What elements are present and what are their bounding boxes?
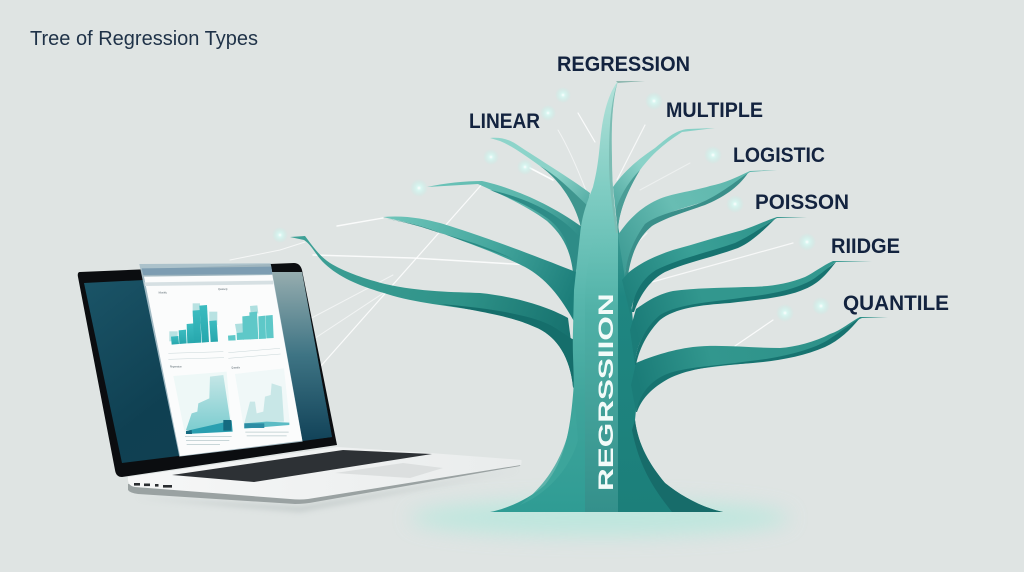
branch: second left (427, 181, 582, 282)
branch: poisson (622, 217, 807, 318)
label: ridge: RIIDGE (831, 235, 900, 258)
laptop screen (84, 272, 332, 463)
branch: linear (490, 138, 590, 232)
dashboard window (139, 263, 303, 457)
strip text: REGRSSIION (594, 293, 618, 491)
window frame (139, 263, 303, 457)
laptop (78, 263, 522, 512)
base deck (128, 447, 522, 500)
window title bar (142, 267, 272, 275)
branch: quantile (631, 317, 888, 412)
laptop base (128, 447, 522, 504)
label: multiple: MULTIPLE (666, 99, 763, 122)
chart 2: Quarterly (218, 288, 228, 291)
branch: third left (383, 216, 576, 325)
base underside (128, 460, 522, 504)
label: logistic: LOGISTIC (733, 144, 825, 167)
window page (144, 275, 302, 456)
labels (469, 53, 949, 315)
laptop shadow (135, 470, 520, 512)
chart 4 (231, 366, 290, 436)
chart 4: Quantile (231, 366, 241, 369)
chart 1: Monthly (159, 292, 168, 295)
branch: multiple (613, 128, 715, 233)
label: quantile: QUANTILE (843, 292, 949, 315)
chart 3: Regression (170, 366, 182, 369)
screen right side (270, 272, 332, 441)
tree (290, 81, 888, 512)
chart 2 (218, 288, 274, 341)
label: regression: REGRESSION (557, 53, 690, 76)
ports (134, 483, 172, 488)
chart 1 (159, 292, 218, 345)
trunk top wisp (616, 81, 645, 83)
branch: fourth left (290, 236, 580, 395)
trunk centre strip (585, 230, 618, 512)
ground glow (410, 500, 790, 536)
trunk left light fold (520, 390, 578, 505)
trunk right deep shadow (632, 420, 723, 512)
label: linear: LINEAR (469, 110, 540, 133)
trunk (490, 81, 618, 512)
trackpad (335, 463, 443, 478)
branch: ridge (630, 261, 872, 365)
keyboard (172, 450, 432, 482)
window toolbar (144, 281, 273, 286)
branch: logistic (618, 170, 777, 278)
chart 3 (170, 366, 233, 445)
laptop lid bezel (78, 263, 337, 477)
connector lines (230, 113, 793, 393)
label: poisson: POISSON (755, 191, 849, 214)
glow nodes (272, 87, 830, 322)
trunk right edge shade (609, 81, 618, 233)
title: Tree of Regression Types (30, 28, 258, 50)
trunk right dark side (618, 225, 723, 512)
mini table strip (168, 348, 281, 359)
